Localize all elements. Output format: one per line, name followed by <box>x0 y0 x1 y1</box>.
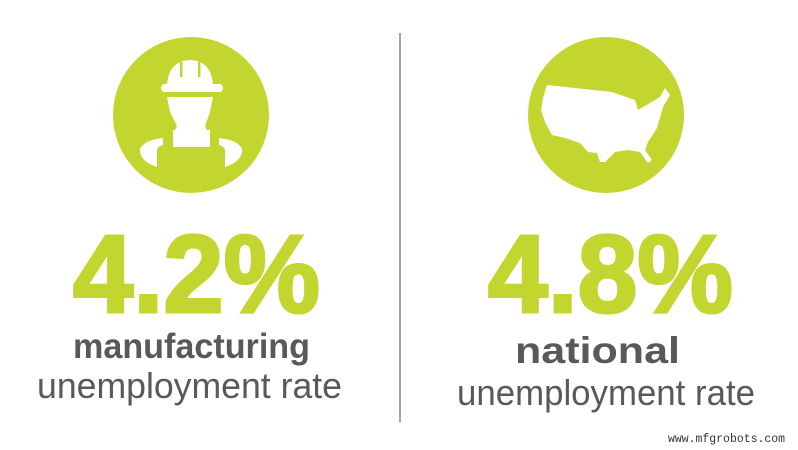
divider <box>399 33 401 422</box>
icon: worker <box>113 37 269 193</box>
stat: 4.2%: 4.2% <box>73 213 320 336</box>
watermark: www.mfgrobots.com <box>668 432 785 446</box>
label: unemployment rate right: unemployment rate <box>457 372 755 413</box>
label: manufacturing: manufacturing <box>73 327 310 366</box>
stat: 4.8%: 4.8% <box>488 213 733 336</box>
label: unemployment rate left: unemployment rate <box>37 365 342 406</box>
label: national: national <box>515 330 680 371</box>
icon: US map <box>528 37 684 193</box>
